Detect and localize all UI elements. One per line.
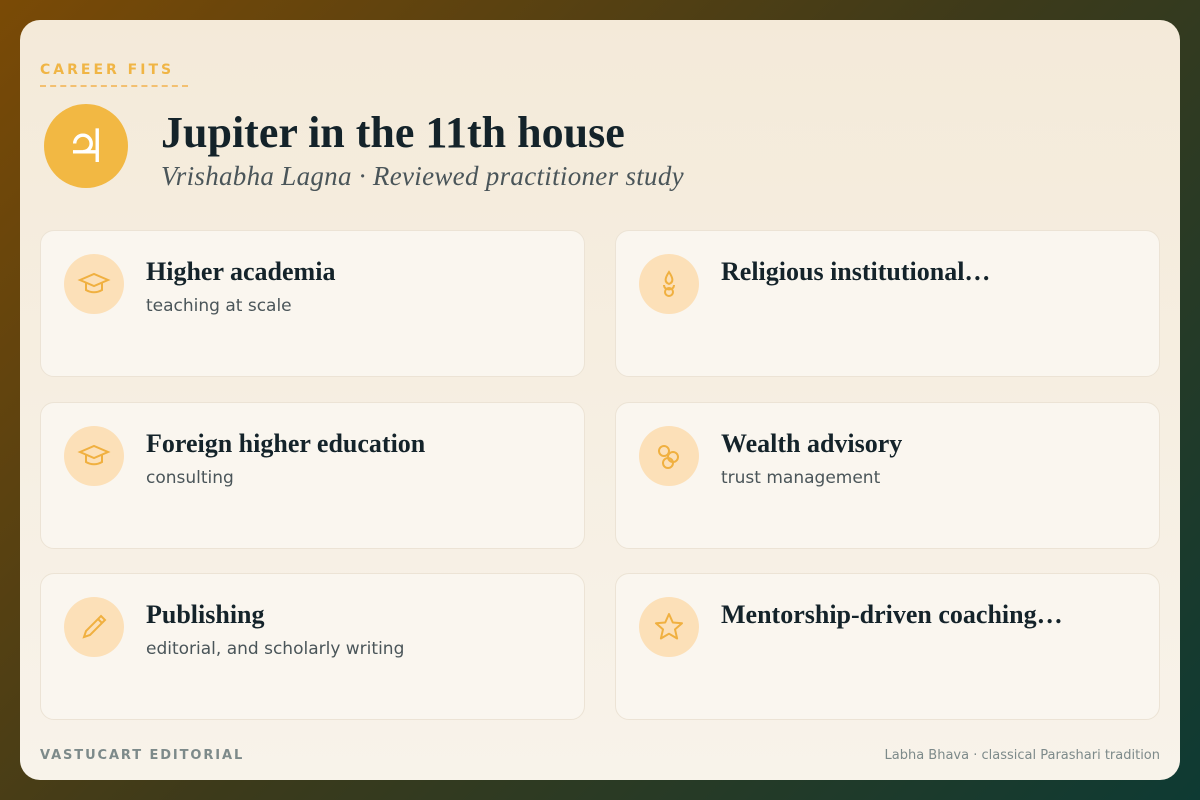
icon: coins (639, 426, 699, 486)
icon: pen (64, 597, 124, 657)
icon: graduation cap (64, 426, 124, 486)
icon: star (639, 597, 699, 657)
icon: graduation cap (64, 254, 124, 314)
title: Jupiter in the 11th house (161, 108, 625, 157)
icon: jupiter badge (44, 104, 128, 188)
card: wealth advisory (615, 402, 1160, 549)
kicker: career fits: CAREER FITS (40, 62, 174, 78)
card: higher academia: teaching at scale (146, 296, 292, 316)
card: religious institutional (615, 230, 1160, 377)
footer note: Labha Bhava · classical Parashari tradition (884, 748, 1160, 763)
subtitle: Vrishabha Lagna · Reviewed practitioner study (161, 161, 684, 191)
card: foreign higher education (40, 402, 585, 549)
card: mentorship coaching: Mentorship-driven coaching… (721, 600, 1063, 629)
icon: flame drops (639, 254, 699, 314)
card: higher academia: Higher academia (146, 257, 335, 286)
card: publishing: editorial, and scholarly writing (146, 639, 404, 659)
icon: jupiter badge: ♃ (65, 119, 107, 173)
kicker: career fits (40, 62, 188, 87)
card: foreign higher education: Foreign higher education (146, 429, 425, 458)
card: wealth advisory: trust management (721, 468, 880, 488)
card: foreign higher education: consulting (146, 468, 234, 488)
card: wealth advisory: Wealth advisory (721, 429, 902, 458)
card: publishing (40, 573, 585, 720)
card: higher academia (40, 230, 585, 377)
card: publishing: Publishing (146, 600, 265, 629)
footer brand: VASTUCART EDITORIAL (40, 748, 244, 763)
card: religious institutional: Religious institutional… (721, 257, 990, 286)
card: mentorship coaching (615, 573, 1160, 720)
